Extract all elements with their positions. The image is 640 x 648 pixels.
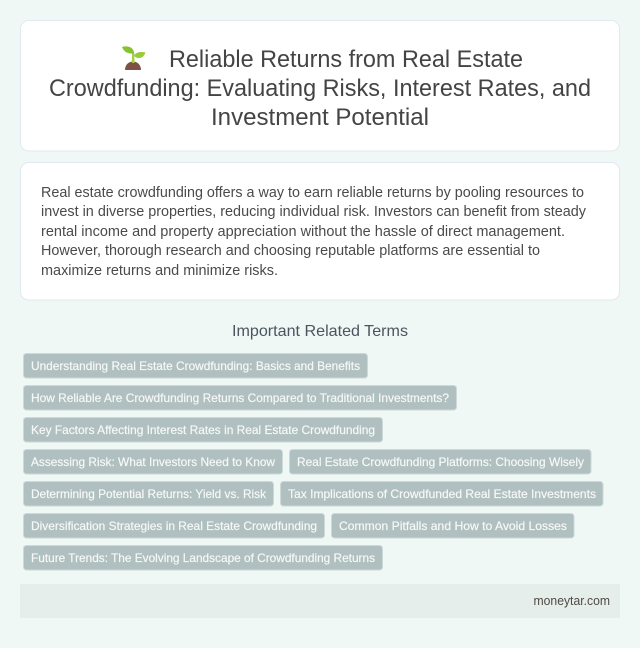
tag: tax implications <box>280 482 603 506</box>
tag: platforms: Real Estate Crowdfunding Platforms: Choosing Wisely <box>297 455 584 469</box>
tag: platforms <box>290 450 591 474</box>
tag: potential returns: Determining Potential Returns: Yield vs. Risk <box>31 487 267 501</box>
tag: assessing risk <box>24 450 282 474</box>
summary text: invest in diverse properties, reducing individual risk. Investors can benefit from steady <box>41 204 587 220</box>
tag: how reliable: How Reliable Are Crowdfunding Returns Compared to Traditional Investments? <box>31 391 449 405</box>
tag: understanding basics: Understanding Real Estate Crowdfunding: Basics and Benefits <box>31 359 360 373</box>
tag: future trends <box>24 546 382 570</box>
tag: understanding basics <box>24 354 368 378</box>
title text: Crowdfunding: Evaluating Risks, Interest Rates, and <box>49 75 591 102</box>
heading: important related terms: Important Related Terms <box>232 323 408 340</box>
tag: key factors <box>24 418 382 442</box>
panel: title card <box>20 20 620 151</box>
title text: Reliable Returns from Real Estate <box>169 46 523 73</box>
panel: summary card <box>20 162 620 300</box>
tag: how reliable <box>24 386 456 410</box>
summary text: maximize returns and minimize risks. <box>41 263 278 279</box>
summary text: However, thorough research and choosing reputable platforms are essential to <box>41 243 540 259</box>
tag: common pitfalls <box>332 514 574 538</box>
icon: seedling <box>122 46 146 70</box>
tag: common pitfalls: Common Pitfalls and How to Avoid Losses <box>339 519 567 533</box>
summary text: rental income and property appreciation without the hassle of direct management. <box>41 224 565 240</box>
title text: Investment Potential <box>211 104 429 131</box>
tag list <box>24 354 603 570</box>
tag: tax implications: Tax Implications of Crowdfunded Real Estate Investments <box>288 487 596 501</box>
tag: diversification: Diversification Strategies in Real Estate Crowdfunding <box>31 519 317 533</box>
summary text <box>41 185 587 279</box>
tag: potential returns <box>24 482 274 506</box>
footer text: site name: moneytar.com <box>534 593 610 608</box>
tag: diversification <box>24 514 324 538</box>
tag: assessing risk: Assessing Risk: What Investors Need to Know <box>31 455 275 469</box>
tag: key factors: Key Factors Affecting Interest Rates in Real Estate Crowdfunding <box>31 423 375 437</box>
tag: future trends: Future Trends: The Evolving Landscape of Crowdfunding Returns <box>31 551 375 565</box>
title text <box>49 46 591 131</box>
footer bar <box>20 584 620 618</box>
summary text: Real estate crowdfunding offers a way to earn reliable returns by pooling resources to <box>41 185 584 201</box>
